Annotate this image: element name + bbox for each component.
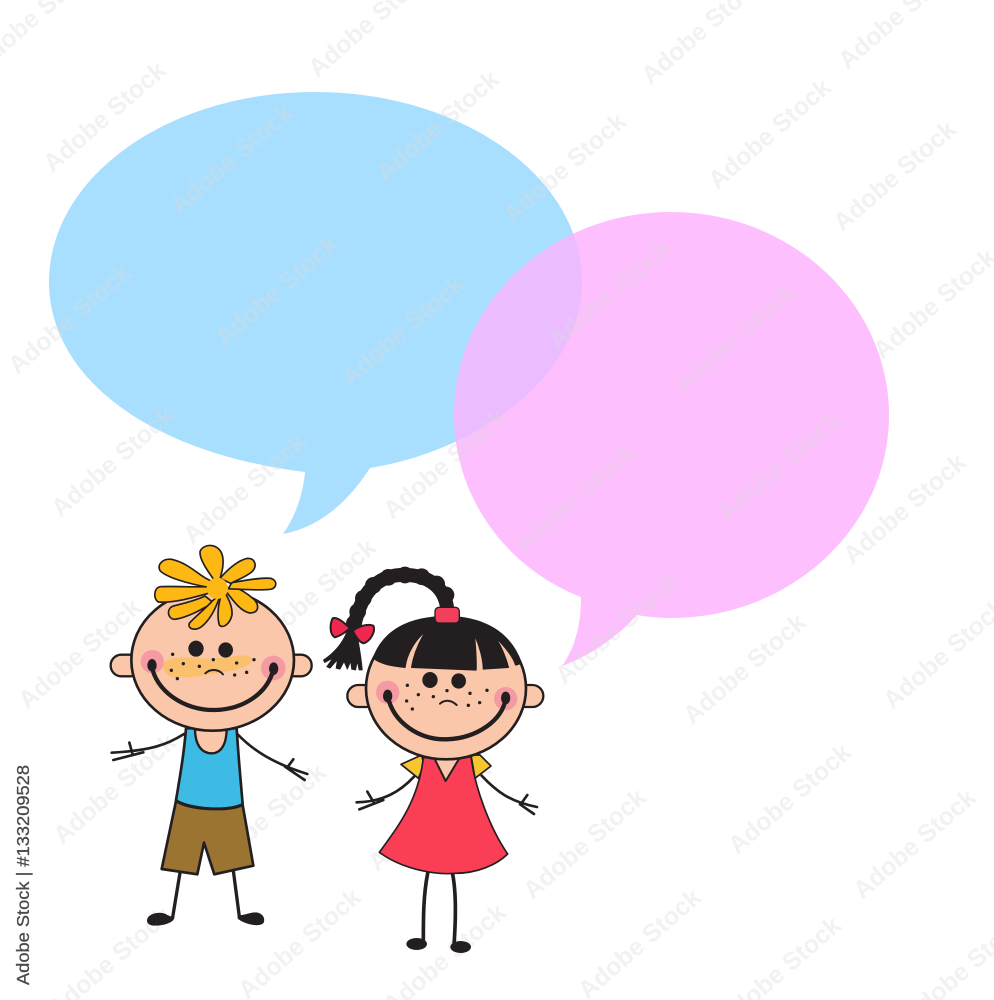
girl bow [331, 618, 374, 643]
boy smile [152, 665, 274, 710]
girl cheeks [376, 681, 517, 710]
watermarks: Adobe Stock [713, 405, 847, 527]
boy arms [112, 734, 307, 780]
girl face [366, 617, 526, 759]
watermarks: Adobe Stock [848, 783, 982, 905]
boy eyes [188, 641, 233, 658]
girl arms [357, 776, 537, 814]
girl freckles [405, 684, 489, 711]
girl eyes [422, 672, 466, 689]
girl head [323, 567, 543, 759]
boy frown [205, 670, 223, 674]
boy smile ends [147, 659, 278, 675]
watermarks: Adobe Stock [210, 230, 344, 352]
girl body [357, 755, 537, 953]
watermarks: Adobe Stock [550, 568, 684, 690]
girl dress [379, 757, 508, 874]
watermarks: Adobe Stock [678, 608, 812, 730]
watermarks: Adobe Stock [498, 107, 632, 229]
watermarks: Adobe Stock [371, 65, 505, 187]
boy freckle band [163, 656, 252, 678]
girl smile ends [383, 690, 510, 704]
watermarks: Adobe Stock [828, 115, 962, 237]
watermarks: Adobe Stock [543, 233, 677, 355]
watermarks: Adobe Stock [336, 270, 470, 392]
watermarks: Adobe Stock [508, 438, 642, 560]
girl character [323, 567, 543, 953]
girl collar [401, 755, 491, 778]
girl ears [347, 685, 543, 707]
boy cheeks [141, 650, 286, 680]
boy neck [195, 728, 227, 753]
girl fringe [373, 617, 521, 670]
boy shirt [176, 728, 243, 809]
boy head [111, 545, 312, 731]
watermarks: Adobe Stock [668, 278, 802, 400]
watermarks: Adobe Stock [38, 56, 172, 178]
bubble overlap [454, 234, 582, 442]
watermarks: Adobe Stock [838, 448, 972, 570]
boy shorts [162, 801, 253, 874]
stock id caption: Adobe Stock | #133209528 [13, 765, 33, 985]
watermarks: Adobe Stock [178, 428, 312, 550]
girl frown [440, 701, 457, 705]
boy hair [155, 545, 276, 629]
boy face [131, 589, 294, 731]
speech bubble: blue [49, 92, 582, 534]
boy character [111, 545, 312, 925]
watermarks: Adobe Stock [723, 738, 857, 860]
watermarks: Adobe Stock [13, 593, 147, 715]
watermarks: Adobe Stock [3, 258, 137, 380]
watermarks: Adobe Stock [378, 403, 512, 525]
boy body [112, 728, 307, 925]
girl scrunchie [435, 607, 459, 623]
speech bubble: pink [454, 212, 889, 666]
girl neckline [434, 758, 459, 781]
boy freckles [170, 653, 256, 680]
watermarks: Adobe Stock [703, 73, 837, 195]
watermarks: Adobe Stock [198, 758, 332, 880]
watermarks: Adobe Stock [48, 728, 182, 850]
watermarks: Adobe Stock [518, 783, 652, 905]
boy ears [111, 655, 312, 676]
girl smile [388, 696, 506, 739]
girl braid tail [323, 628, 362, 670]
watermarks: Adobe Stock [363, 755, 497, 877]
watermarks: Adobe Stock [46, 401, 180, 523]
girl braid [346, 567, 454, 631]
girl legs and shoes [406, 873, 471, 953]
watermarks: Adobe Stock [165, 98, 299, 220]
watermarks: Adobe Stock [248, 533, 382, 655]
boy legs and shoes [147, 871, 264, 925]
